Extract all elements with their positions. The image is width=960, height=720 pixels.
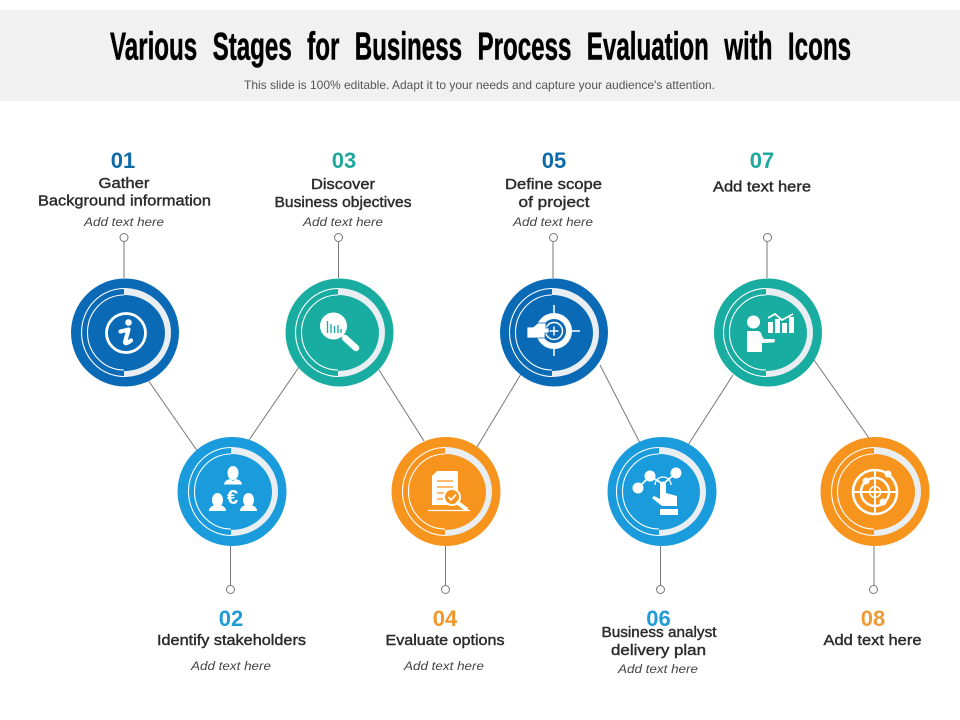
stage 04 (386, 437, 504, 673)
number 08: 08 (861, 606, 885, 631)
icon: document review (428, 471, 470, 510)
stage 07 (713, 148, 822, 386)
header band (0, 10, 960, 101)
pin 06 (656, 586, 664, 594)
number 07: 07 (750, 148, 774, 173)
stage 02 (157, 437, 306, 673)
label 01 (38, 176, 211, 210)
label 04: Evaluate options (386, 633, 504, 649)
label 06: delivery plan (611, 643, 706, 659)
pin 03 (334, 234, 342, 242)
pin 02 (226, 586, 234, 594)
stage 05 (500, 148, 608, 386)
icon: stakeholders with euro: € (227, 487, 238, 509)
description 01: Add text here (83, 215, 164, 229)
icon: presenter with chart (747, 314, 794, 352)
label 03 (274, 177, 412, 211)
description 06: Add text here (617, 662, 698, 676)
label 05: of project (518, 195, 590, 211)
disc 04 (392, 437, 500, 546)
description 03: Add text here (302, 215, 383, 229)
description 02: Add text here (190, 659, 271, 673)
disc 07 (714, 278, 822, 386)
description 04: Add text here (403, 659, 484, 673)
disc 05 (500, 278, 608, 386)
label 01: Gather (98, 176, 150, 192)
label 06: Business analyst (602, 625, 716, 641)
number 05: 05 (542, 148, 566, 173)
label 08: Add text here (824, 633, 922, 649)
number 04: 04 (433, 606, 458, 631)
stage 06 (602, 437, 716, 676)
number 03: 03 (332, 148, 356, 173)
disc 02 (178, 437, 286, 546)
label 05: Define scope (505, 177, 602, 193)
subtitle: This slide is 100% editable. Adapt it to your needs and capture your audience's attention. (244, 78, 715, 92)
connector lines between stages (124, 241, 874, 586)
label 05 (505, 177, 602, 211)
icon: network touch (632, 468, 682, 515)
disc 06 (608, 437, 716, 546)
pin 07 (764, 234, 772, 242)
icon: radar (853, 470, 897, 514)
disc 03 (286, 278, 394, 386)
pin 01 (120, 234, 128, 242)
label 03: Business objectives (274, 195, 412, 211)
description 05: Add text here (512, 215, 593, 229)
stage 08 (820, 437, 930, 649)
label 03: Discover (311, 177, 375, 193)
icon: target with hand (527, 305, 580, 356)
number 06: 06 (646, 606, 671, 631)
number 01: 01 (111, 148, 135, 173)
pin 04 (442, 586, 450, 594)
pin 08 (870, 586, 878, 594)
label 06 (602, 625, 716, 659)
label 07: Add text here (713, 180, 811, 196)
stage 01 (38, 148, 211, 386)
icon: magnifier with chart (320, 312, 356, 348)
label 02: Identify stakeholders (157, 633, 306, 649)
number 02: 02 (219, 606, 243, 631)
label 01: Background information (38, 194, 211, 210)
disc 08 (820, 437, 930, 546)
stage 03 (274, 148, 412, 386)
icon: info (106, 314, 146, 352)
disc 01 (71, 278, 179, 386)
pin 05 (550, 234, 558, 242)
